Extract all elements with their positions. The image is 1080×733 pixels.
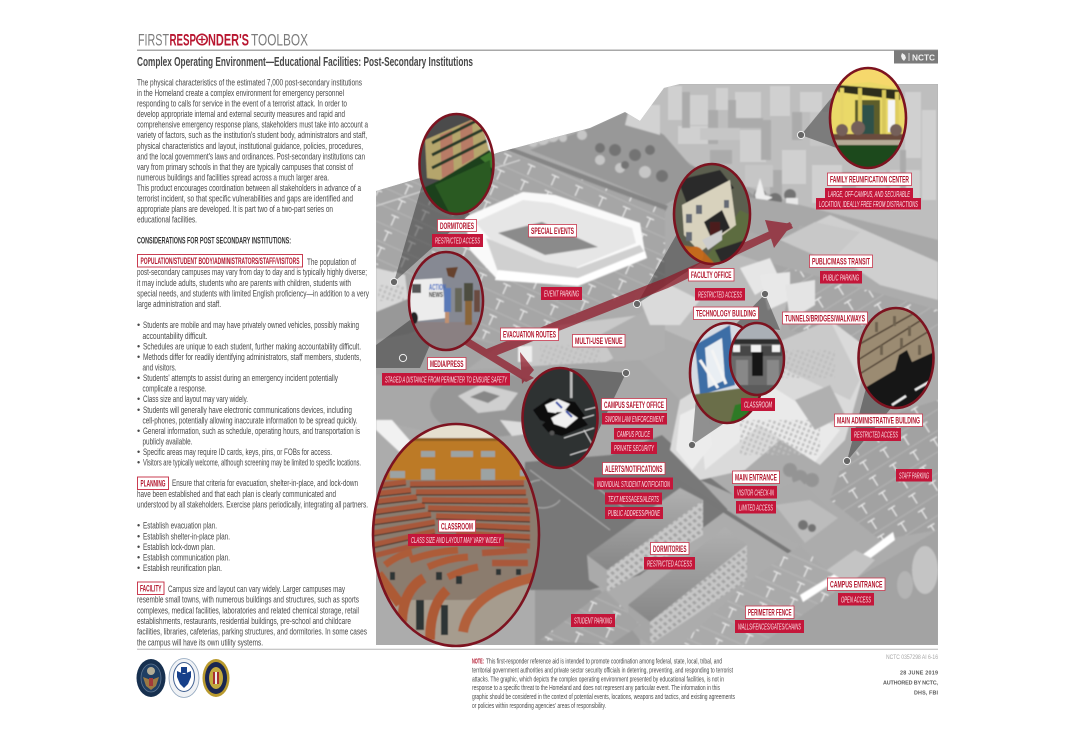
section: planning: • [137,552,140,562]
label: public address/phone: PUBLIC ADDRESS/PHONE [608,508,660,518]
label: sworn law enforcement [602,413,667,424]
section: population: • [137,394,140,404]
text: STAFF PARKING [899,470,929,480]
intro text block: numerous buildings and facilities spread across a much larger area. [137,172,329,182]
intro text block: The physical characteristics of the estimated 7,000 post-secondary institutions [137,78,362,88]
section: population: Schedules are unique to each student, further making accountability difficult. [143,342,361,352]
header logo: First Responder's Toolbox: TOOLBOX [251,32,308,50]
intro text block: This product encourages coordination between all stakeholders in advance of a [137,183,361,193]
circle: tunnels/bridges/walkways [858,302,934,408]
white church [755,178,772,205]
campus gate and bottom right [760,530,938,645]
disclaimer note: NOTE: [472,658,484,666]
label: public parking [820,271,862,284]
label: campus police [614,428,653,440]
section: facility: resemble small towns, with numerous buildings and structures, such as sports [137,595,359,605]
intro text block: physical characteristics and layout, institutional guidance, policies, procedures, [137,141,363,151]
circle: media/press [409,252,484,350]
city blocks [640,84,938,240]
label: restricted access [695,288,745,300]
label: class size and layout [408,534,504,546]
section: population: • [137,447,140,457]
disclaimer note: territorial government authorities and private sector security officials in deterring, preventing, and responding to terrorist [472,668,733,674]
central left fields [520,362,605,376]
campus map illustration [376,84,938,645]
section: population: it may include adults, students who are parents with children, students with [137,278,351,288]
tag: planning: PLANNING [140,478,166,488]
section: population: Students will generally have electronic communications devices, including [143,405,352,415]
disclaimer note: attacks. The graphic, which depicts the complex operating environment presented by educational facilities, is not in [472,676,724,683]
section: planning: Establish lock-down plan. [143,542,215,552]
label: classroom: CLASSROOM [744,400,772,410]
section: planning: Establish reunification plan. [143,563,222,573]
section: facility: the campus will have its own utility systems. [137,637,263,647]
section: facility: establishments, restaurants, residential buildings, pre-school and childcare [137,616,351,626]
label: campus entrance: CAMPUS ENTRANCE [830,579,882,590]
label: alerts/notifications: ALERTS/NOTIFICATIONS [605,463,662,474]
label: large off-campus location: LARGE, OFF-CAMPUS, AND SECURABLE [828,189,910,199]
label: technology building [694,307,758,320]
label: classroom lecture hall [438,520,476,532]
right parking [830,400,938,540]
date and authorship: AUTHORED BY NCTC, [883,680,938,686]
circle: family reunification center [830,68,906,169]
dark sports field [520,435,740,590]
date and authorship: DHS, FBI [914,690,938,696]
section: planning [137,477,368,573]
label: visitor check-in: VISITOR CHECK-IN [737,488,774,498]
tag: population [138,254,302,267]
tag: facility: FACILITY [140,583,162,593]
circle: technology building [690,323,765,423]
section: population: • [137,320,140,330]
label: individual student notification [594,478,673,490]
section: population: General information, such as schedule, operating hours, and transportation is [143,426,360,436]
section: population: • [137,405,140,415]
label: open access: OPEN ACCESS [841,594,871,604]
label: classroom lecture hall: CLASSROOM [441,520,473,532]
label: multi-use venue [572,334,625,347]
circle: campus safety office [522,368,598,468]
title: Complex Operating Environment—Educational Facilities: Post-Secondary Institutions [137,55,473,69]
label: campus police: CAMPUS POLICE [617,429,650,439]
label: alerts/notifications [602,462,665,474]
central plaza [700,480,804,510]
label: walls/fences/gates/chains [735,620,804,633]
date and authorship: 28 JUNE 2019 [900,670,938,676]
seal: ODNI [136,659,166,697]
text: INDIVIDUAL STUDENT NOTIFICATION [597,479,670,489]
considerations heading: CONSIDERATIONS FOR POST SECONDARY INSTITUTIONS: [137,236,291,246]
label: family reunification center: FAMILY REUNIFICATION CENTER [830,174,909,185]
label: walls/fences/gates/chains: WALLS/FENCES/GATES/CHAINS [738,622,801,632]
section: planning: understood by all stakeholders. Exercise plans periodically, integrating all partners. [137,500,368,510]
section: planning: • [137,532,140,542]
section: population: post-secondary campuses may vary from day to day and is typically highly diverse; [137,267,367,277]
section: population: cell-phones, potentially allowing inaccurate information to be spread quickly. [142,416,358,426]
intro text block: in the Homeland create a complex environment for emergency personnel [137,88,344,98]
label: multi-use venue: MULTI-USE VENUE [575,335,622,346]
label: dormitories lower [650,542,689,554]
left buildings [376,268,408,312]
section: population: Students are mobile and may have privately owned vehicles, possibly making [143,320,359,330]
section: population: Class size and layout may vary widely. [143,394,248,404]
circle: classroom computers [730,323,784,395]
label: perimeter fence [746,606,794,618]
label: restricted access [851,428,901,441]
main administration complex [670,320,870,480]
label: private security: PRIVATE SECURITY [614,443,655,453]
header logo: First Responder's Toolbox: FIRST [138,32,169,50]
label: faculty office [688,268,734,281]
text: STAGED A DISTANCE FROM PERIMETER TO ENSURE SAFETY [385,374,508,384]
circle: dormitories [419,113,494,214]
disclaimer note: This first-responder reference aid is intended to promote coordination among federal, state, local, tribal, and [486,658,722,666]
section: planning: • [137,542,140,552]
label: public/mass transit [810,255,872,268]
section: population: Students' attempts to assist during an emergency incident potentially [143,373,338,383]
label: open access [838,593,874,606]
section: planning: Establish evacuation plan. [143,521,217,531]
label: restricted access lower [644,557,695,570]
label: special events [528,224,576,237]
section: population: Specific areas may require ID cards, keys, pins, or FOBs for access. [143,447,332,457]
label: technology building: TECHNOLOGY BUILDING [696,308,756,319]
section: population: Methods differ for readily identifying administrators, staff members, students, [143,352,361,362]
circle: faculty office [674,164,750,264]
section: population: • [137,352,140,362]
label: campus safety office: CAMPUS SAFETY OFFICE [604,399,664,410]
label: staff parking [896,469,932,482]
label: campus safety office [602,398,666,410]
section: population: special needs, and students with limited English proficiency—in addition to a very [137,289,369,299]
label: large off-campus location: LOCATION, IDEALLY FREE FROM DISTRACTIONS [819,199,918,209]
label: private security [611,442,657,454]
NCTC badge [894,50,938,64]
callout nodes [390,131,851,465]
section: planning: Ensure that criteria for evacuation, shelter-in-place, and lock-down [172,478,358,488]
label: restricted access: RESTRICTED ACCESS [435,236,480,246]
label: special events: SPECIAL EVENTS [531,225,574,236]
label: visitor check-in [734,486,777,498]
section: planning: • [137,563,140,573]
stadium [465,192,645,280]
section: population: • [137,342,140,352]
label: faculty office: FACULTY OFFICE [691,269,732,280]
label: family reunification center [828,173,912,186]
label: evacuation routes: EVACUATION ROUTES [503,329,556,340]
label: sworn law enforcement: SWORN LAW ENFORCEMENT [605,414,664,424]
bottom parking [535,590,640,645]
intro text block: educational facilities. [137,215,197,225]
intro text block [137,78,368,225]
label: main entrance: MAIN ENTRANCE [735,472,777,483]
label: restricted access: RESTRICTED ACCESS [854,430,898,440]
disclaimer note [472,658,735,710]
intro text block: variety of factors, such as the institution's student body, administrators and staff, [137,130,367,140]
section: planning: Establish communication plan. [143,552,230,562]
section: planning: • [137,521,140,531]
intro text block: comprehensive emergency response plans, stakeholders must take into account a [137,120,368,130]
label: large off-campus location [816,188,921,210]
label: restricted access: RESTRICTED ACCESS [698,290,742,300]
section: planning: have been established and that each plan is clearly communicated and [137,489,336,499]
label: main administrative building: MAIN ADMINISTRATIVE BUILDING [837,415,920,426]
section: population: Visitors are typically welcome, although screening may be limited to specific locations. [143,458,361,468]
seal: FBI [202,659,230,697]
label: student parking [571,614,615,627]
section: facility: facilities, libraries, cafeterias, parking structures, and dormitories. In some cases [137,627,367,637]
tag: population: POPULATION/STUDENT BODY/ADMINISTRATORS/STAFF/VISITORS [140,256,300,266]
text: TEXT MESSAGES/ALERTS [608,494,659,504]
section: population: large administration and staff. [137,299,221,309]
label: public parking: PUBLIC PARKING [823,272,859,282]
label: tunnels/bridges/walkways [782,312,868,324]
stadium parking [380,150,666,212]
label: student parking: STUDENT PARKING [574,616,612,626]
intro text block: and the local government's laws and ordinances. Post-secondary institutions can [137,151,365,161]
multi-use venue [525,316,634,366]
section: population [137,254,369,468]
label: restricted access lower: RESTRICTED ACCESS [647,558,692,568]
tag: facility [138,582,164,594]
label: main entrance [732,471,780,484]
label: evacuation routes [500,328,558,340]
NCTC badge: NCTC [912,52,935,62]
date and authorship [883,670,938,696]
label: media/press: MEDIA/PRESS [430,358,464,369]
label: limited access [736,501,776,514]
header logo: First Responder's Toolbox [138,32,308,50]
tag: planning [138,477,168,490]
disclaimer note: or policies within responding agencies' areas of responsibility. [472,703,606,710]
roof complex and faculty area [816,214,938,300]
park with trees [531,112,754,205]
section: facility: complexes, medical facilities, laboratories and related chemical storage, retail [137,605,359,615]
label: public address/phone [605,507,663,519]
label: dormitories [438,220,476,232]
disclaimer note: response to a specific threat to the Homeland and does not represent any particular event. The information in this [472,685,720,692]
circle: media/press: ACTION [429,283,446,292]
label: main administrative building [834,414,922,426]
evacuation arrows [462,220,793,384]
label: limited access: LIMITED ACCESS [739,502,773,512]
label: perimeter fence: PERIMETER FENCE [748,607,792,618]
intro text block: appropriate plans are developed. It is part two of a two-part series on [137,204,333,214]
label: classroom [741,398,775,411]
label: class size and layout: CLASS SIZE AND LAYOUT MAY VARY WIDELY [411,535,502,545]
label: dormitories: DORMITORIES [440,220,474,231]
intro text block: terrorist incident, so that specific vulnerabilities and gaps are identified and [137,194,353,204]
diagonal road [502,147,668,212]
intro text block: responding to calls for service in the event of a terrorist attack. In order to [137,99,347,109]
label: dormitories lower: DORMITORIES [653,543,686,554]
section: population: and visitors. [142,363,176,373]
section: population: • [137,426,140,436]
circle: media/press: NEWS [429,292,443,299]
agency seals [136,658,230,698]
label: event parking: EVENT PARKING [544,289,579,299]
label: media/press [428,358,466,370]
disclaimer note: graphic should be considered in the context of potential events, locations, weapons and tactics, and existing agreements [472,694,735,701]
seal: DHS [169,658,199,698]
intro text block: develop appropriate internal and external security measures and rapid and [137,109,345,119]
section: population: The population of [307,257,356,267]
section: facility: Campus size and layout can vary widely. Larger campuses may [168,584,345,594]
label: staged a distance [382,373,510,386]
label: restricted access [432,234,483,247]
callout cones [394,185,470,282]
section: planning: Establish shelter-in-place plan. [143,532,230,542]
label: text messages/alerts [605,492,662,504]
document number: NCTC 0357298 AI 6-16 [886,655,939,661]
label: tunnels/bridges/walkways: TUNNELS/BRIDGES/WALKWAYS [785,312,865,324]
section: facility [137,582,367,647]
label: public/mass transit: PUBLIC/MASS TRANSIT [812,256,870,267]
header logo: First Responder's Toolbox: NDER'S [208,32,249,50]
dormitory buildings [587,488,703,570]
section: population: accountability difficult. [142,331,208,341]
label: campus entrance [828,578,885,590]
section: population: complicate a response. [142,384,206,394]
label: event parking [541,287,582,300]
section: population: • [137,373,140,383]
circle: classroom lecture hall [373,424,540,647]
section: population: publicly available. [142,437,192,447]
intro text block: vary from primary schools in that they are typically campuses that consist of [137,162,353,172]
section: population: • [137,458,140,468]
header logo: First Responder's Toolbox: RESP [170,32,196,50]
